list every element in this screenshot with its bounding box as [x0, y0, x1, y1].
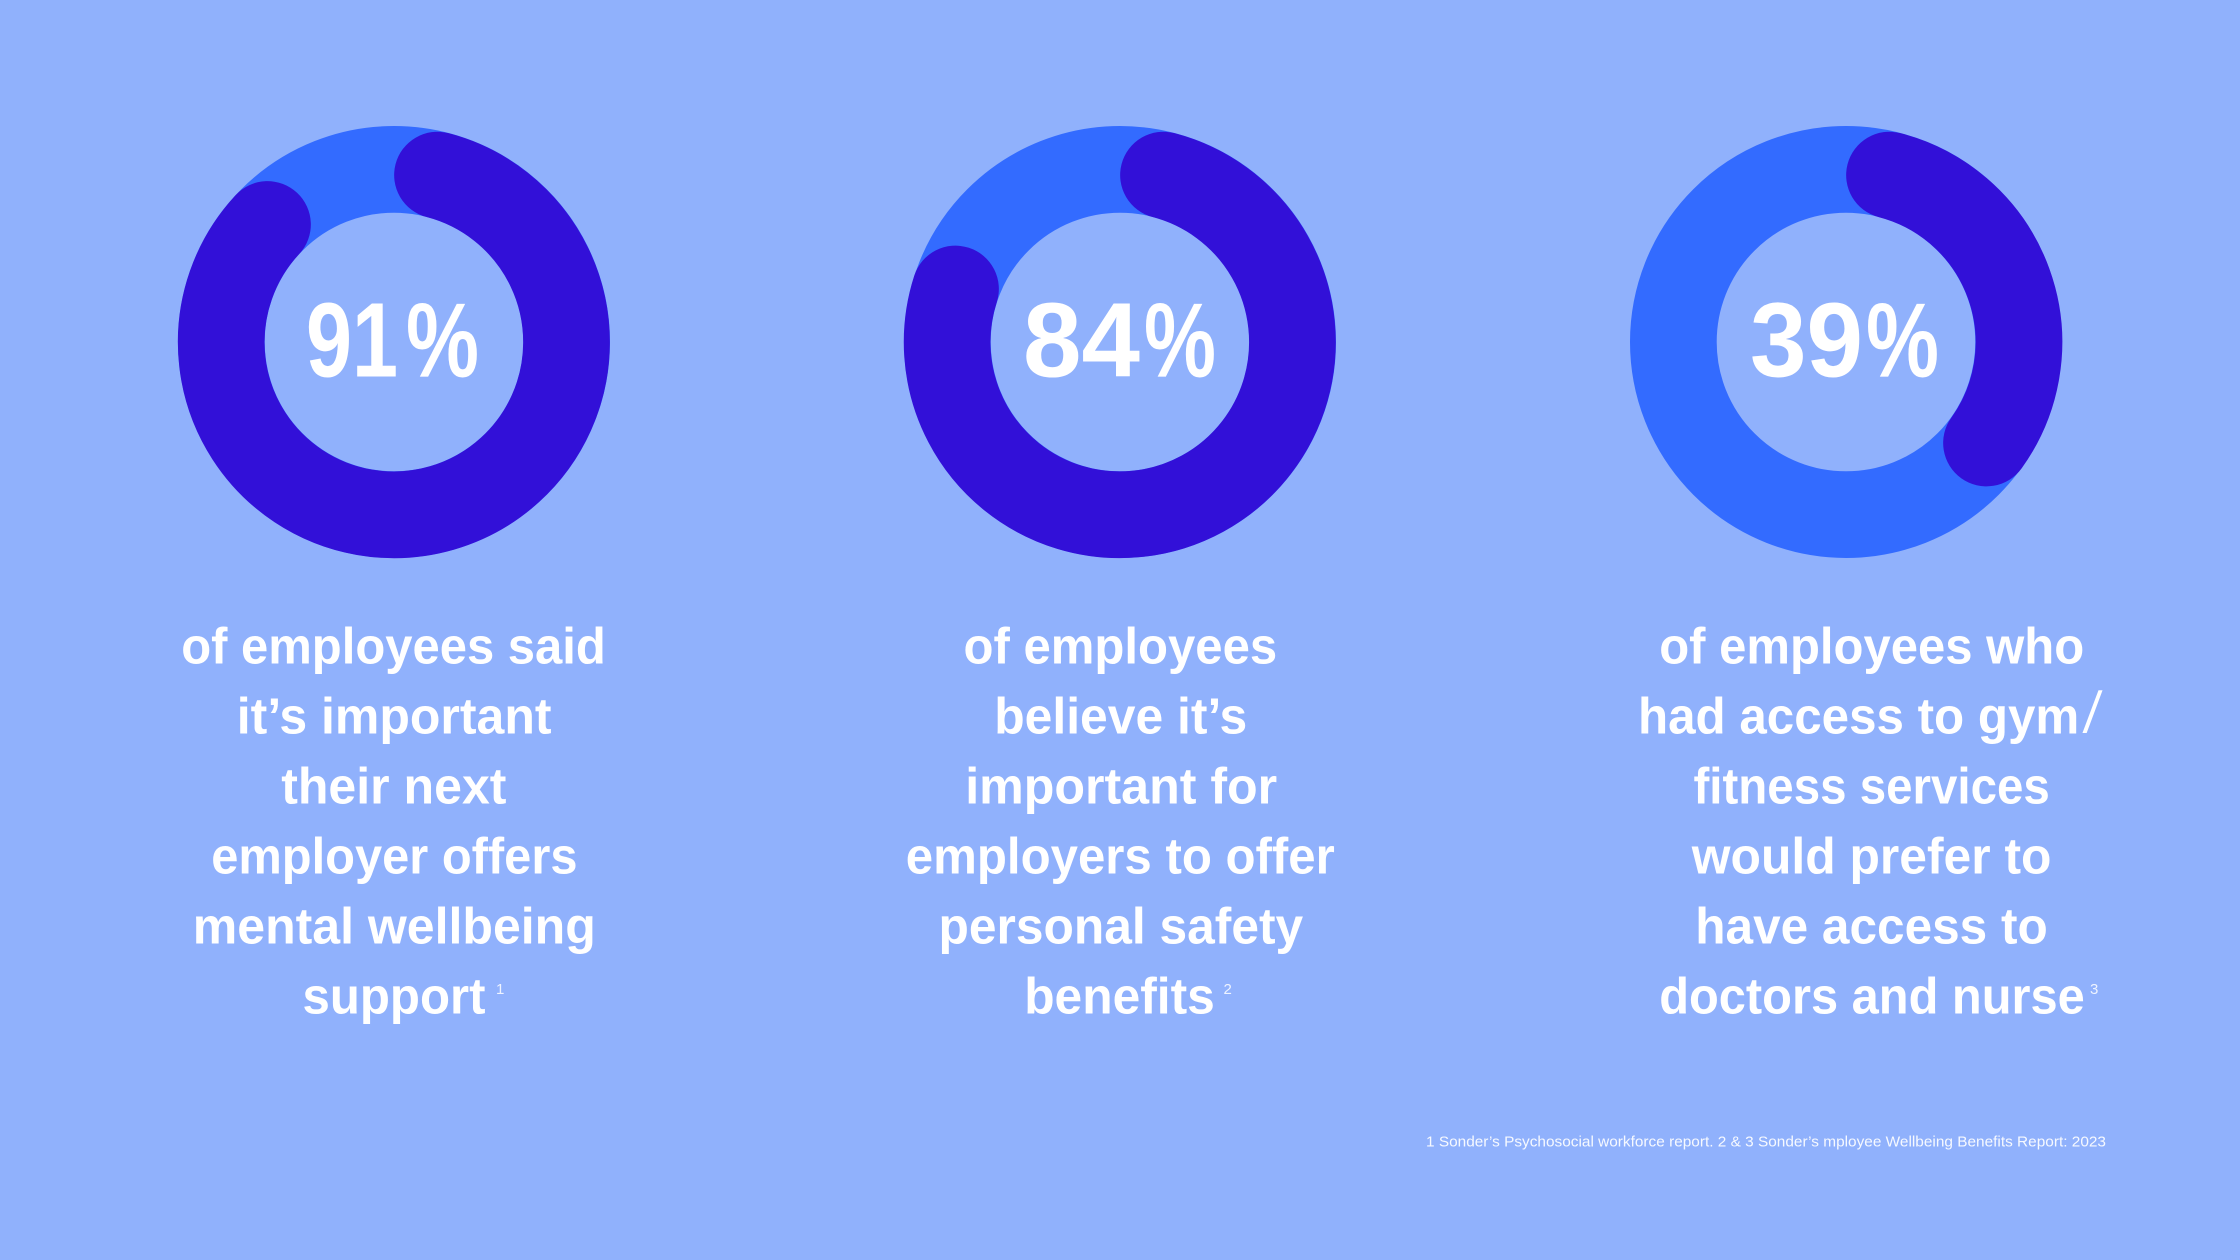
text block: mental wellbeing support: their next — [281, 758, 507, 814]
text block: doctors and nurse access: / — [2081, 679, 2104, 746]
text block: personal safety benefits: believe it’s — [994, 688, 1247, 744]
text block: mental wellbeing support: of employees said — [181, 617, 606, 674]
text block: mental wellbeing support — [181, 617, 606, 1024]
footnote: sources: 1 Sonder’s Psychosocial workforce report. 2 & 3 Sonder’s mployee Wellbeing Benefits Report: 2023 — [1426, 1134, 2106, 1151]
figure: 84% — [1023, 282, 1216, 400]
text block: personal safety benefits — [906, 617, 1335, 1024]
panel: 91% stat — [181, 169, 606, 1025]
text block: doctors and nurse access: 3 — [2090, 981, 2098, 998]
text block: mental wellbeing support: it’s important — [237, 688, 552, 744]
figure: 39%: 39 — [1750, 282, 1863, 400]
figure: 91%: 91 — [306, 282, 398, 400]
text block: doctors and nurse access: of employees who — [1659, 617, 2084, 674]
text block: doctors and nurse access — [1638, 617, 2104, 1024]
figure: 39% — [1750, 282, 1939, 400]
text block: personal safety benefits: benefits — [1024, 968, 1215, 1024]
figure: 91% — [306, 282, 479, 400]
panel: 84% stat — [906, 169, 1335, 1025]
figure: 84%: % — [1144, 282, 1216, 400]
text block: doctors and nurse access: have access to — [1695, 898, 2048, 954]
text block: personal safety benefits: of employees — [964, 617, 1277, 674]
donut chart: 91% — [221, 169, 567, 515]
donut chart: 39% — [1673, 169, 2019, 515]
figure: 91%: % — [406, 282, 479, 400]
text block: mental wellbeing support: 1 — [496, 981, 504, 998]
panel: 39% stat — [1638, 169, 2104, 1025]
text block: personal safety benefits: important for — [965, 758, 1277, 814]
text block: doctors and nurse access: doctors and nurse — [1659, 968, 2085, 1024]
donut chart: 84% — [947, 169, 1293, 515]
text block: personal safety benefits: 2 — [1224, 981, 1232, 998]
text block: doctors and nurse access: fitness services — [1694, 758, 2050, 814]
text block: personal safety benefits: personal safety — [938, 898, 1304, 954]
text block: doctors and nurse access: would prefer to — [1691, 828, 2052, 884]
text block: mental wellbeing support: mental wellbeing — [193, 898, 596, 954]
figure: 39%: % — [1866, 282, 1939, 400]
text block: doctors and nurse access: had access to gym — [1638, 688, 2079, 744]
text block: mental wellbeing support: employer offers — [211, 828, 577, 884]
text block: mental wellbeing support: support — [302, 968, 486, 1024]
figure: 84%: 84 — [1023, 282, 1140, 400]
text block: personal safety benefits: employers to offer — [906, 828, 1335, 884]
